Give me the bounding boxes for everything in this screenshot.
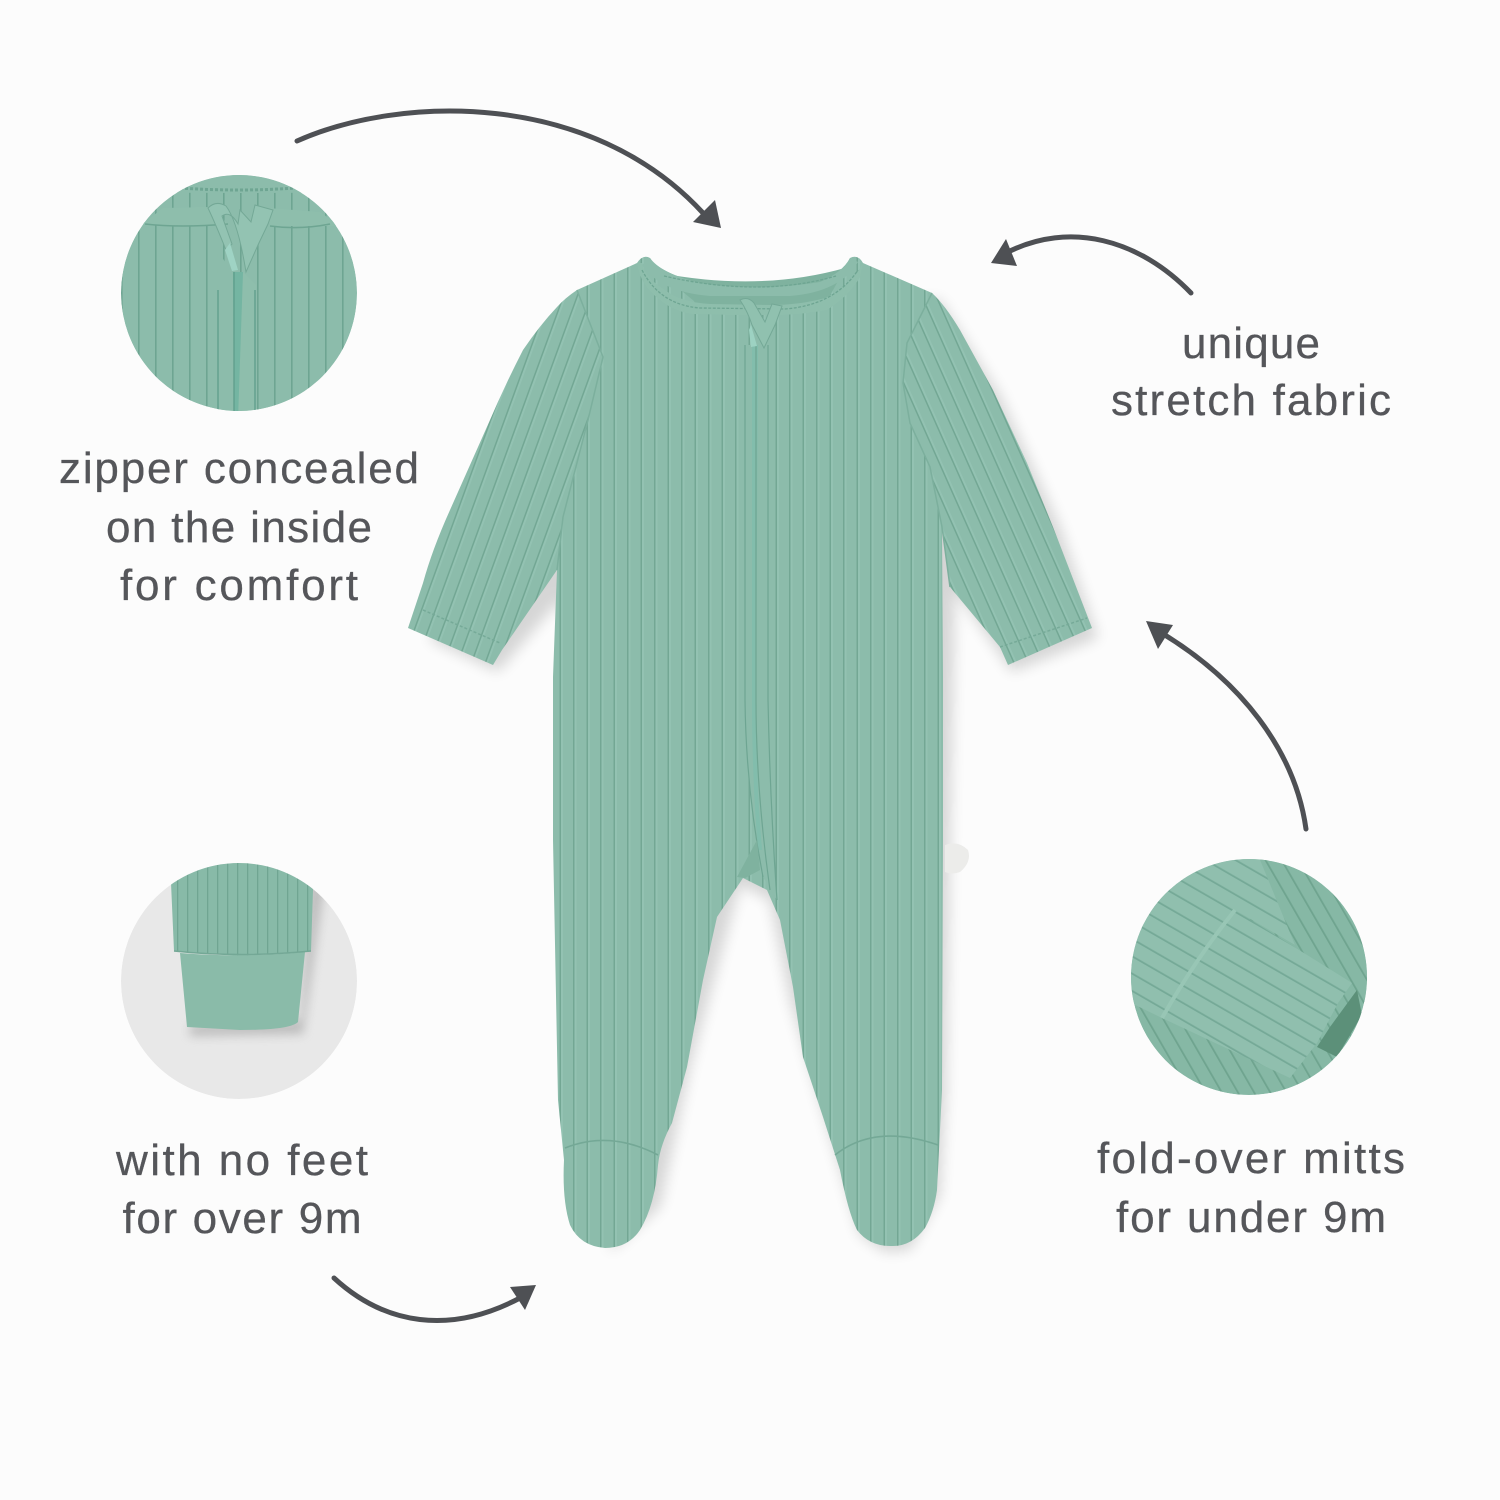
zipper tab <box>225 243 238 271</box>
right sleeve <box>903 293 1092 665</box>
label tag <box>945 843 969 874</box>
text: fold-over mitts <box>1097 1134 1405 1242</box>
left placket <box>218 259 234 411</box>
sleeve shadow <box>190 880 325 1036</box>
back neck band <box>642 258 858 296</box>
text: unique stretch fabric: unique <box>1182 319 1320 368</box>
panel: fold-over mitts detail <box>1120 850 1370 1095</box>
detail background <box>1131 859 1367 1095</box>
front collar band <box>637 263 863 315</box>
collar stitching <box>180 188 295 190</box>
neck seams <box>145 224 330 228</box>
left sleeve <box>408 290 603 665</box>
neck band right <box>274 208 336 226</box>
arrow: bottom left <box>334 1278 536 1320</box>
zipper tab <box>749 325 757 347</box>
garment shadow <box>430 300 1098 1252</box>
text: with no feet: for over 9m <box>122 1194 362 1243</box>
zipper pull <box>740 299 782 348</box>
text: fold-over mitts: fold-over mitts <box>1097 1134 1405 1183</box>
text: unique stretch fabric: stretch fabric <box>1111 376 1391 425</box>
text: fold-over mitts: for under 9m <box>1116 1193 1386 1242</box>
zipper strip <box>233 272 243 420</box>
folded mitt <box>1162 910 1352 1078</box>
detail background <box>121 175 357 411</box>
upper left sleeve <box>1131 859 1294 1017</box>
left cuff stitching <box>423 610 500 643</box>
inside neck ribs <box>660 268 845 306</box>
panel: zipper detail <box>120 173 360 420</box>
right placket <box>240 320 254 411</box>
fold edge <box>1162 910 1235 1018</box>
left foot seam <box>565 1140 658 1155</box>
upper collar band <box>176 175 302 193</box>
text: with no feet: with no feet <box>115 1136 368 1185</box>
text: zipper concealed: zipper concealed <box>59 444 419 493</box>
right foot seam <box>835 1136 938 1155</box>
dark cuff opening <box>1317 990 1362 1057</box>
sleeve seams <box>557 290 950 587</box>
arrow: top right <box>991 237 1191 293</box>
text: unique stretch fabric <box>1111 319 1391 425</box>
placket stitching <box>745 345 777 900</box>
zipper teal strip <box>752 345 762 850</box>
text: zipper concealed: for comfort <box>120 561 358 610</box>
text: with no feet <box>115 1136 368 1243</box>
arrow: top left <box>297 111 721 228</box>
cuff edge <box>174 951 311 954</box>
zipper placket <box>745 345 777 900</box>
fold-over cuff <box>180 952 305 1030</box>
product: sleepsuit <box>408 257 1098 1252</box>
text: zipper concealed: on the inside <box>106 503 372 552</box>
zipper pull loop <box>208 203 273 272</box>
detail background <box>121 863 357 1099</box>
panel: no feet detail <box>121 860 357 1099</box>
arrow: right <box>1146 621 1306 829</box>
zipper edges <box>218 272 255 420</box>
body <box>553 257 943 1248</box>
sleeve ribs <box>170 860 314 956</box>
collar seams <box>642 270 858 309</box>
crotch fold <box>737 840 760 878</box>
right cuff stitching <box>1000 618 1087 647</box>
text: zipper concealed <box>59 444 419 610</box>
upper right fabric <box>1260 860 1367 1002</box>
neck band left <box>143 207 224 226</box>
